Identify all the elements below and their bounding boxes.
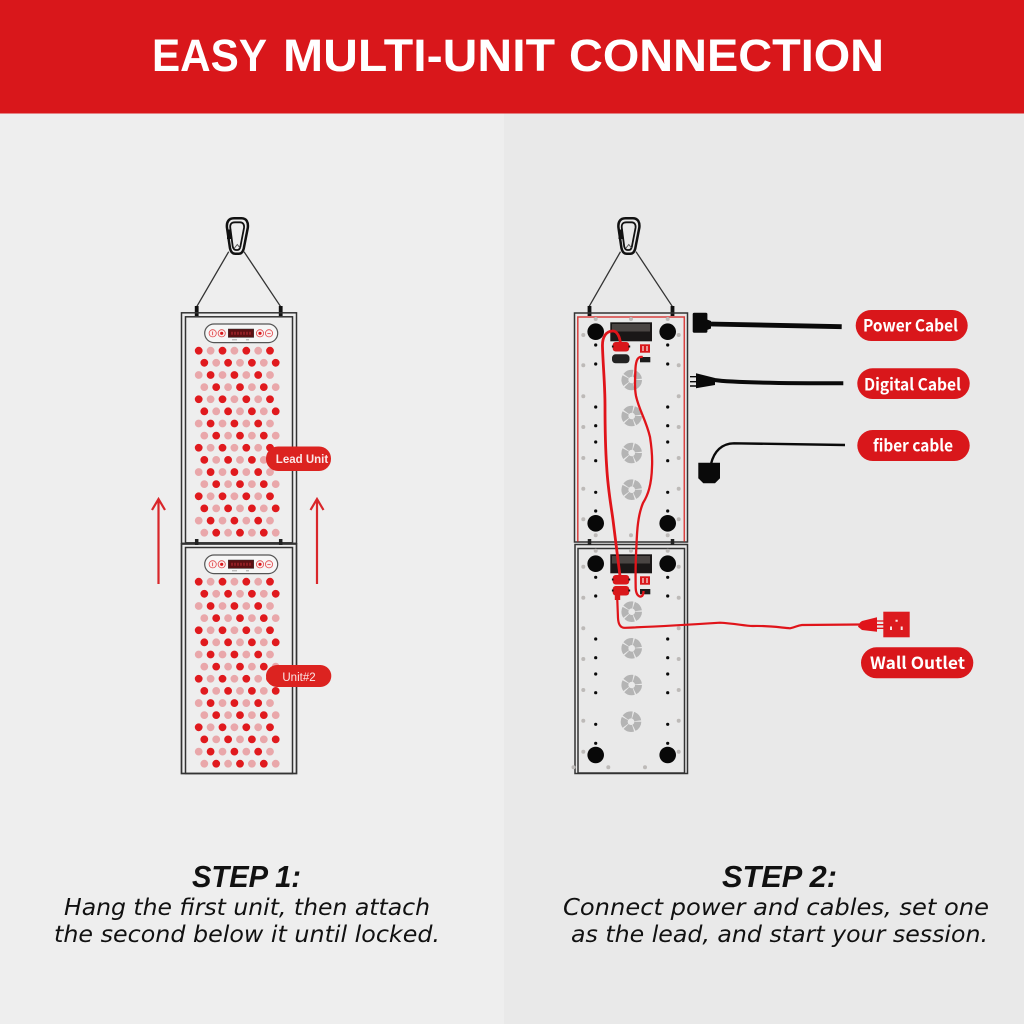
red cable to wall outlet xyxy=(617,600,860,628)
lead rear frame xyxy=(574,313,688,542)
fans xyxy=(624,373,638,728)
grey mounting dots xyxy=(574,319,679,767)
description line 4: as the lead, and start your session. xyxy=(571,922,988,948)
icon: power cable xyxy=(693,313,842,333)
unit 2 joint tabs xyxy=(197,539,281,545)
joint tabs xyxy=(590,539,672,545)
unit 2 LED array xyxy=(199,582,276,764)
black screw dots xyxy=(596,345,668,743)
description line 2: the second below it until locked. xyxy=(54,922,440,948)
vent boxes xyxy=(610,322,652,573)
text block: step 1 xyxy=(54,859,440,948)
arrow: right up xyxy=(310,499,324,584)
label: Wall Outlet: Wall Outlet xyxy=(870,650,965,674)
icon: carabiner right xyxy=(618,218,639,254)
background: left panel xyxy=(0,113,504,1024)
panel: step 2 rear-view units xyxy=(574,218,860,774)
hanging ropes right xyxy=(589,252,672,307)
label: Lead Unit: Lead Unit xyxy=(276,454,328,466)
label: Power Cabel: Power Cabel xyxy=(863,312,958,336)
icon: carabiner left xyxy=(227,218,248,254)
title: CONNECTION xyxy=(569,30,884,81)
red power link cable xyxy=(602,331,620,576)
title xyxy=(152,30,884,81)
icon: digital cable xyxy=(690,373,843,388)
lead unit frame xyxy=(182,313,296,543)
hanging tabs left xyxy=(197,306,281,316)
icon: fiber cable xyxy=(698,443,845,483)
background: right panel xyxy=(504,113,1024,1024)
panel: step 1 front-view units xyxy=(152,218,331,774)
title: MULTI-UNIT xyxy=(283,30,555,81)
label: Unit#2 xyxy=(266,665,331,687)
label: Wall Outlet xyxy=(861,647,973,678)
hanging tabs right xyxy=(590,306,672,316)
title: EASY xyxy=(152,30,267,81)
lead unit LED array xyxy=(199,351,276,533)
unit 2 frame xyxy=(182,544,296,774)
unit 2 control panel xyxy=(205,555,278,574)
label: fiber cable xyxy=(857,430,970,461)
heading: step 1: STEP 1: xyxy=(192,859,301,894)
text block: step 2 xyxy=(563,859,989,948)
description line 1: Hang the first unit, then attach xyxy=(64,895,430,921)
unit 2 rear frame xyxy=(575,544,688,774)
large black feet xyxy=(587,323,676,763)
heading: step 2: STEP 2: xyxy=(722,859,837,894)
hanging ropes left xyxy=(197,252,281,307)
red digital link cable xyxy=(635,357,652,597)
lead unit sockets xyxy=(612,342,650,363)
description line 3: Connect power and cables, set one xyxy=(563,895,989,921)
arrow: left up xyxy=(152,499,165,584)
label: Unit#2: Unit#2 xyxy=(282,672,316,684)
header banner xyxy=(0,0,1024,114)
lead unit control panel xyxy=(205,324,278,343)
label: Digital Cabel: Digital Cabel xyxy=(864,372,961,396)
label: Lead Unit xyxy=(266,446,331,471)
unit 2 sockets xyxy=(612,575,650,600)
label: fiber cable: fiber cable xyxy=(873,432,953,456)
icon: wall outlet with plug xyxy=(858,612,910,637)
